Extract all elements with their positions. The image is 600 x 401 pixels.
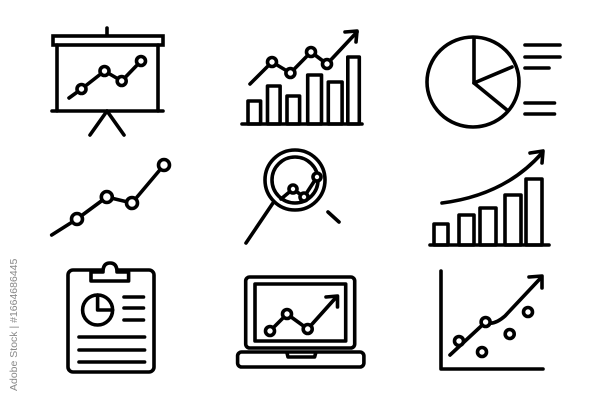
icon: line graph xyxy=(52,160,170,235)
icon: laptop with chart xyxy=(238,277,364,367)
icon: bar chart with trend arrow xyxy=(242,31,362,124)
watermark text: Adobe Stock | #1664686445 xyxy=(8,259,20,391)
icon: magnifier with chart xyxy=(246,150,339,243)
icon: pie chart with legend lines xyxy=(427,37,560,127)
icon: presentation board xyxy=(52,28,163,135)
icon: scatter plot with trend xyxy=(441,271,543,369)
icon: clipboard report xyxy=(68,263,154,372)
icon: growth bars with curved arrow xyxy=(430,151,549,245)
